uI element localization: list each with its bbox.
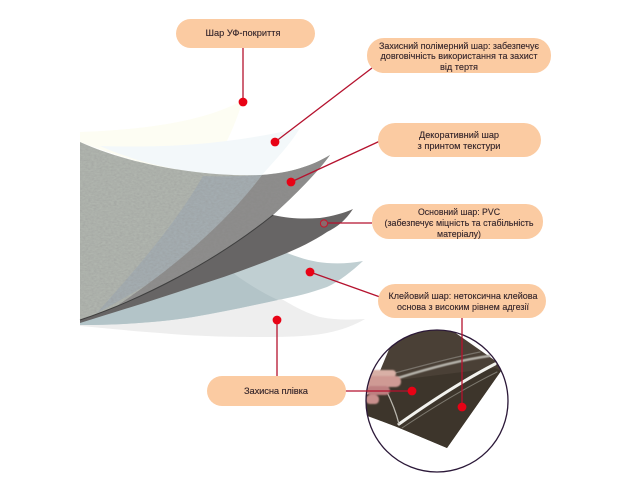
callout line: UV coating xyxy=(239,48,247,106)
adhesive: darker overlap xyxy=(80,270,278,325)
label: decorative layer xyxy=(378,123,541,157)
label: adhesive: Клейовий шар: нетоксична клейова xyxy=(388,290,538,301)
label: PVC layer: (забезпечує міцність та стабільність xyxy=(384,217,534,228)
label: polymer layer: Захисний полімерний шар: забезпечує xyxy=(379,40,539,51)
callout line: decorative layer xyxy=(287,141,380,186)
layer: dark PVC base xyxy=(80,209,353,323)
layer: grey decorative sheet xyxy=(80,140,335,325)
label: UV coating xyxy=(176,19,315,48)
circular photo inset xyxy=(362,322,508,472)
label: adhesive xyxy=(378,284,546,318)
callout line: adhesive xyxy=(306,268,380,297)
layer: protective film xyxy=(80,295,365,337)
label: polymer layer: довговічність використання та захист xyxy=(380,50,538,61)
layer illustration xyxy=(80,100,365,337)
label: UV coating: Шар УФ-покриття xyxy=(206,27,280,38)
label: PVC layer: матеріалу) xyxy=(437,228,481,239)
label: protective film: Захисна плівка xyxy=(244,385,309,396)
label: polymer layer: від тертя xyxy=(440,61,478,72)
label: protective film xyxy=(207,376,346,406)
callout line: photo right xyxy=(458,318,466,411)
photo: hand xyxy=(366,370,401,404)
layer: adhesive xyxy=(80,250,363,325)
label: adhesive: основа з високим рівнем адгезії xyxy=(397,301,529,312)
label: decorative layer: з принтом текстури xyxy=(418,140,500,151)
photo: dark panel xyxy=(368,330,501,448)
callout line: photo left xyxy=(345,387,416,395)
label: PVC layer: Основний шар: PVC xyxy=(418,206,500,217)
layer: UV coating xyxy=(80,100,243,176)
photo: peeled film highlights xyxy=(386,352,497,428)
callout line: polymer layer xyxy=(271,68,372,146)
label: polymer layer xyxy=(367,38,551,73)
layer: protective polymer xyxy=(100,128,300,175)
callout line: film xyxy=(273,316,281,377)
callout line: PVC layer xyxy=(320,220,372,227)
label: PVC layer xyxy=(372,204,543,239)
label: decorative layer: Декоративний шар xyxy=(419,129,499,140)
